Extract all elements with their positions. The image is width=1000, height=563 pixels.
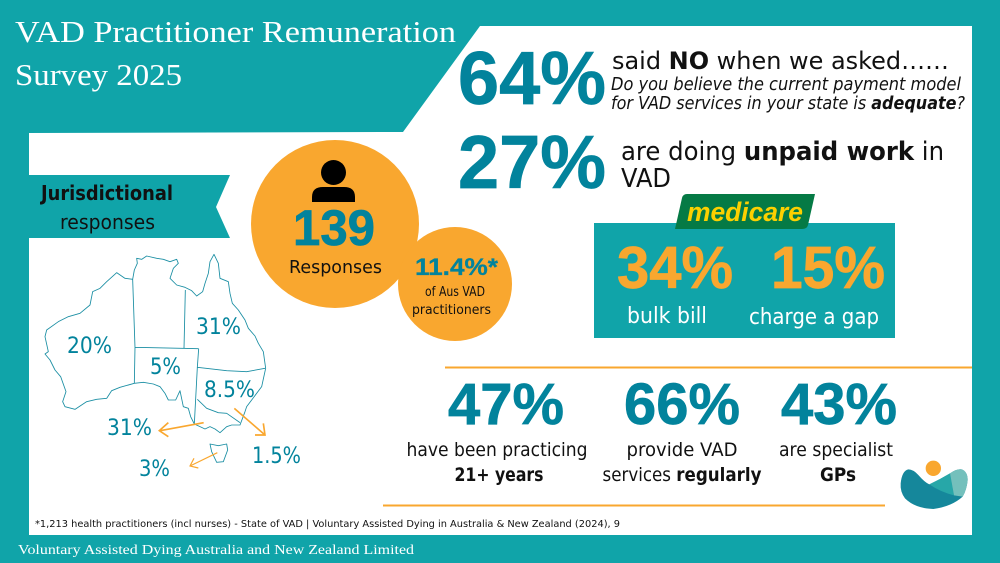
stat: 64% said no: for VAD services in your state is adequate? [611,94,965,114]
stat: 64% said no [458,36,965,120]
stat: 34% bulk bill: bulk bill [627,304,707,329]
stat: 27% unpaid work [458,120,944,204]
stat: 47% practicing [406,372,588,486]
stat: 43% specialist GPs [779,372,897,486]
stat: 43% specialist GPs: GPs [820,464,856,486]
stat: 47% practicing: 47% [448,372,564,437]
stat: 43% specialist GPs: 43% [781,372,897,437]
stat: 66% regular: services regularly [602,464,762,486]
stat: 43% specialist GPs: are specialist [779,439,893,461]
stat: 47% practicing: have been practicing [406,439,588,461]
stat: 64% said no: said NO when we asked…… [612,47,949,75]
stat: 34% bulk bill [617,235,733,329]
circle: 139 responses: Responses [289,257,382,278]
jurisdictional banner [29,175,230,238]
footnote: *1,213 health practitioners (incl nurses) - State of VAD | Voluntary Assisted Dying in Australia & New Zealand (2024), 9 [35,519,620,530]
map: Australia: 5% [150,355,181,380]
stat: 15% charge a gap [749,235,885,330]
stat: 27% unpaid work: 27% [458,120,606,204]
arrows to small jurisdictions [159,408,265,468]
title: VAD Practitioner Remuneration [15,14,457,49]
medicare logo: medicare [687,197,803,227]
map labels: 20% [67,334,112,359]
stat: 64% said no: 64% [458,36,606,120]
map: Australia [45,254,301,482]
circle: 11.4% of Aus VAD practitioners: practitioners [412,303,491,318]
map: Australia: 3% [139,457,170,482]
stat: 47% practicing: 21+ years [454,464,544,486]
panel: medicare [594,194,895,338]
jurisdictional banner: Jurisdictional [39,181,173,205]
stat: 66% regular: 66% [624,372,740,437]
stat: 15% charge a gap: 15% [771,235,885,301]
stat: 34% bulk bill: 34% [617,235,733,301]
circle: 139 responses: 139 [293,200,375,256]
divider lines [383,368,972,506]
stat: 15% charge a gap: charge a gap [749,305,879,330]
stat: 64% said no: Do you believe the current payment model [611,75,961,95]
footer organisation name: Voluntary Assisted Dying Australia and New Zealand Limited [18,543,414,558]
icon: person [312,160,355,202]
map: Australia: 1.5% [252,444,301,469]
map outline [45,254,266,462]
circle: 11.4% of Aus VAD practitioners: 11.4%* [415,254,499,281]
map: Australia: 31% [107,416,152,441]
jurisdictional banner: responses [60,210,155,234]
map: Australia: 31% [196,315,241,340]
stat: 66% regular: provide VAD [626,439,738,461]
circle: 11.4% of Aus VAD practitioners: of Aus VAD [425,285,485,300]
map: Australia: 8.5% [204,378,255,403]
stat: 27% unpaid work: VAD [621,164,671,194]
medicare panel background [594,223,895,338]
title [15,14,457,92]
circle: 11.4% of Aus VAD practitioners [398,227,512,341]
circle: 139 responses [251,140,419,308]
stat: 27% unpaid work: are doing unpaid work in [621,137,944,167]
title: Survey 2025 [15,57,182,92]
logo [901,461,968,509]
stat: 66% regular [602,372,762,486]
